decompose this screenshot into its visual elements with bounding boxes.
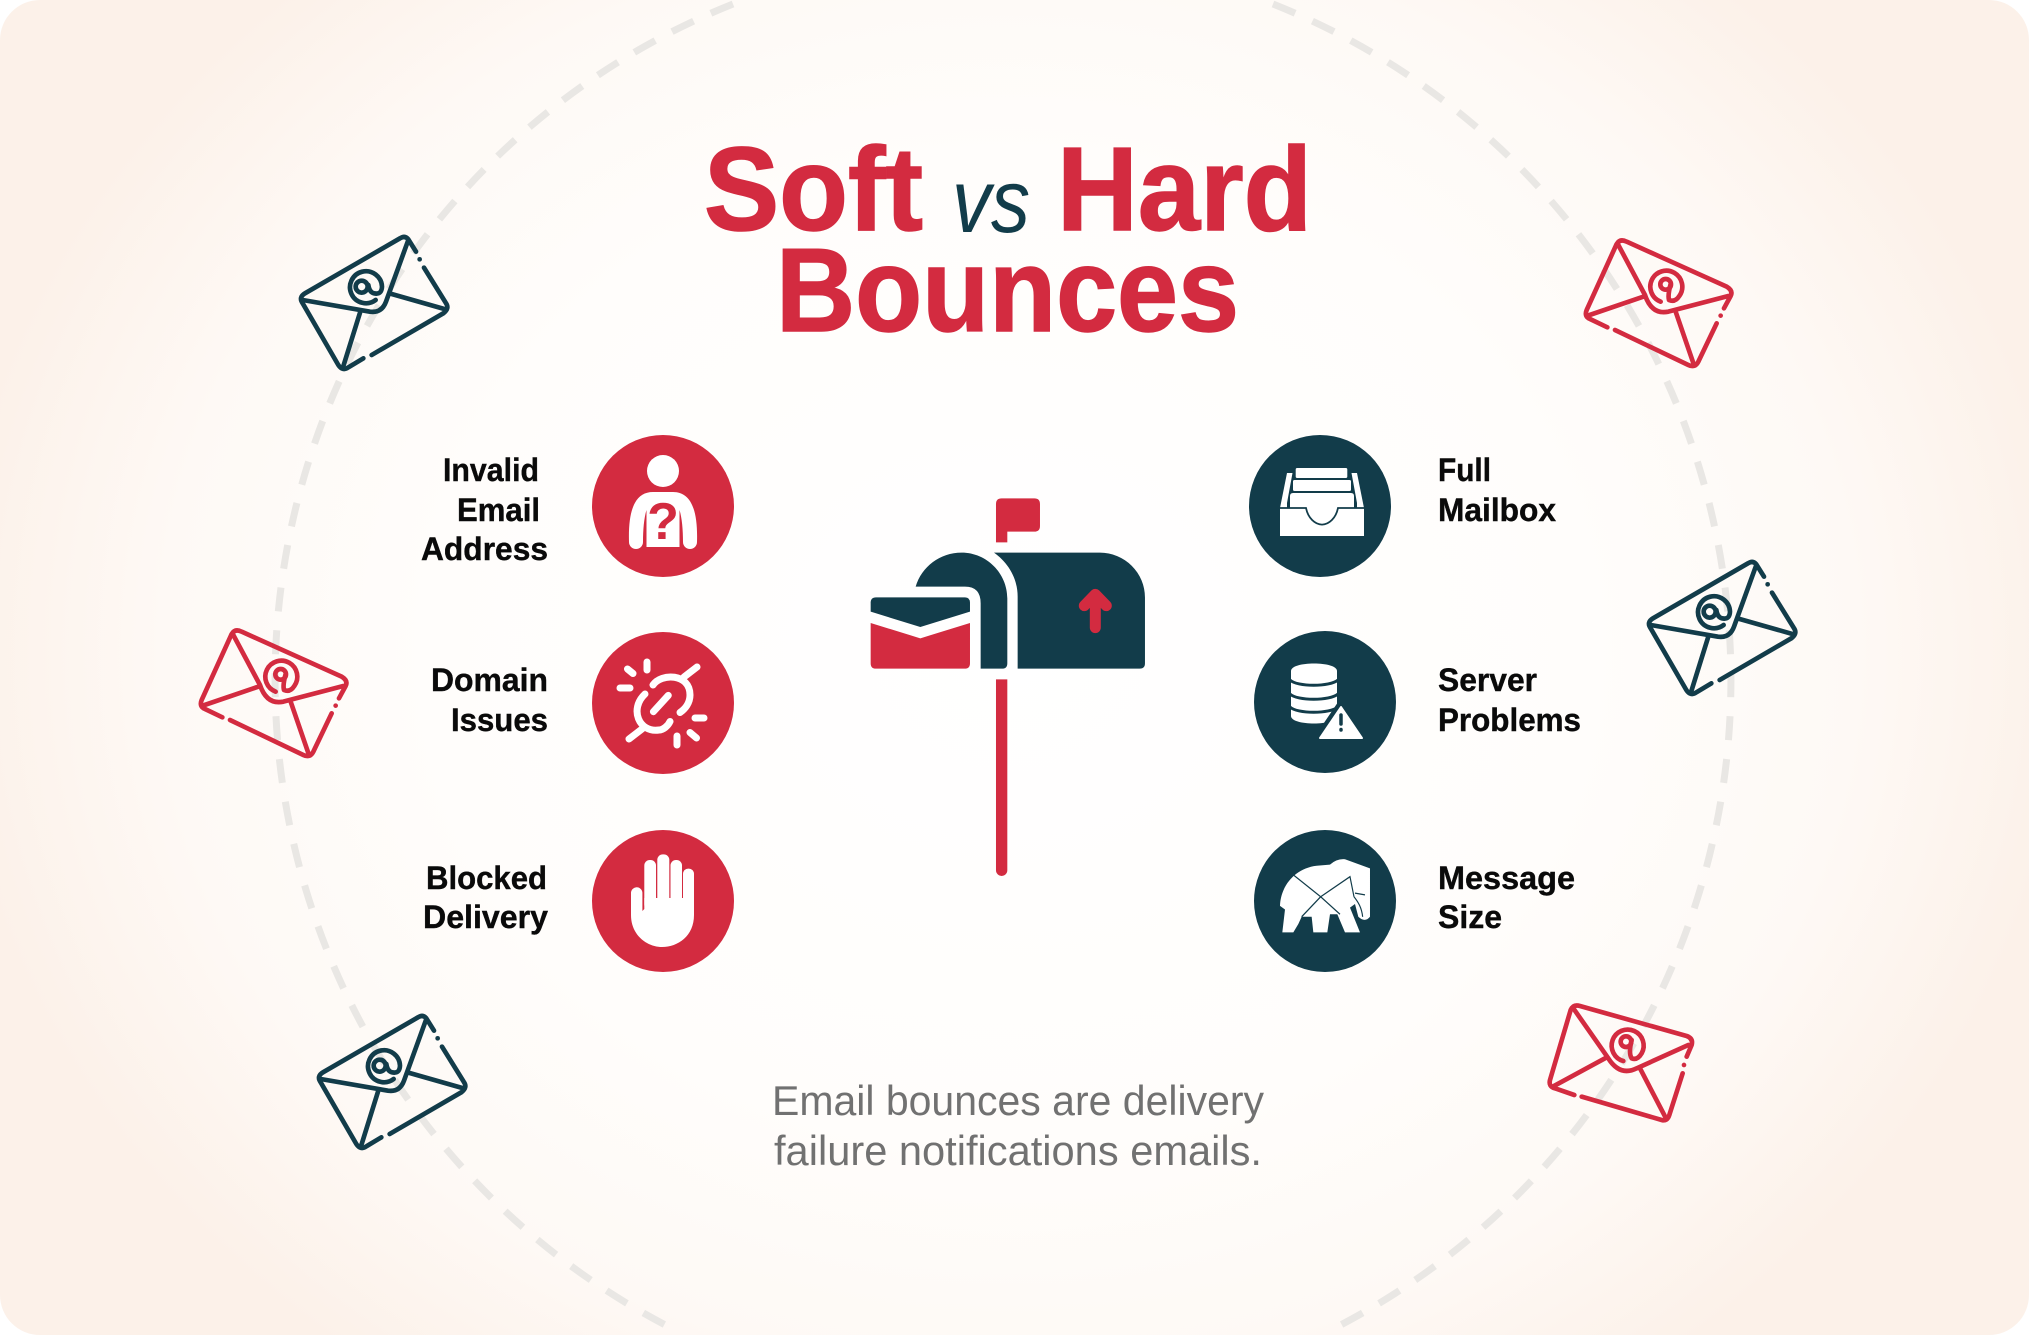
left label: Invalid Email Address: Invalid — [443, 452, 539, 488]
left label: Blocked Delivery: Blocked — [426, 860, 547, 896]
envelope: teal right — [1649, 562, 1795, 694]
dashed orbit circle — [275, 4, 1731, 1331]
right label: Server Problems: Server — [1438, 662, 1537, 698]
right label: Server Problems: Problems — [1438, 702, 1581, 738]
right label: Full Mailbox: Full — [1438, 452, 1491, 488]
icon: broken link — [592, 632, 734, 774]
left label: Domain Issues: Domain — [431, 662, 548, 698]
envelope: red bottom right — [1550, 1005, 1692, 1120]
left label: Invalid Email Address — [421, 452, 548, 567]
left label: Blocked Delivery: Delivery — [423, 899, 548, 935]
title: Soft — [704, 123, 923, 256]
envelope: teal top left — [301, 237, 447, 369]
icon: elephant with envelope — [1254, 830, 1396, 972]
title: Bounces — [776, 224, 1239, 357]
envelope: red left — [201, 630, 346, 756]
left label: Blocked Delivery — [423, 860, 548, 935]
envelope: red top right — [1586, 240, 1731, 366]
caption text — [772, 1077, 1264, 1174]
caption text: Email bounces are delivery — [772, 1077, 1264, 1124]
icon: raised hand — [592, 830, 734, 972]
title: vs — [952, 152, 1030, 252]
right label: Full Mailbox: Mailbox — [1438, 492, 1556, 528]
right label: Full Mailbox — [1438, 452, 1556, 528]
icon: person with question mark: ? — [647, 493, 679, 551]
icon: person with question mark — [592, 435, 734, 577]
right label: Message Size — [1438, 860, 1575, 935]
right label: Server Problems — [1438, 662, 1581, 738]
icon: database with warning — [1254, 631, 1396, 773]
title — [704, 123, 1312, 357]
illustration: mailbox with envelope — [871, 498, 1145, 876]
icon: full inbox tray — [1249, 435, 1391, 577]
title: Hard — [1057, 123, 1312, 256]
caption text: failure notifications emails. — [774, 1127, 1262, 1174]
left label: Domain Issues: Issues — [451, 702, 548, 738]
left label: Domain Issues — [431, 662, 548, 738]
envelope: teal bottom left — [319, 1016, 465, 1148]
left label: Invalid Email Address: Address — [421, 531, 548, 567]
right label: Message Size: Message — [1438, 860, 1575, 896]
right label: Message Size: Size — [1438, 899, 1502, 935]
left label: Invalid Email Address: Email — [457, 492, 540, 528]
